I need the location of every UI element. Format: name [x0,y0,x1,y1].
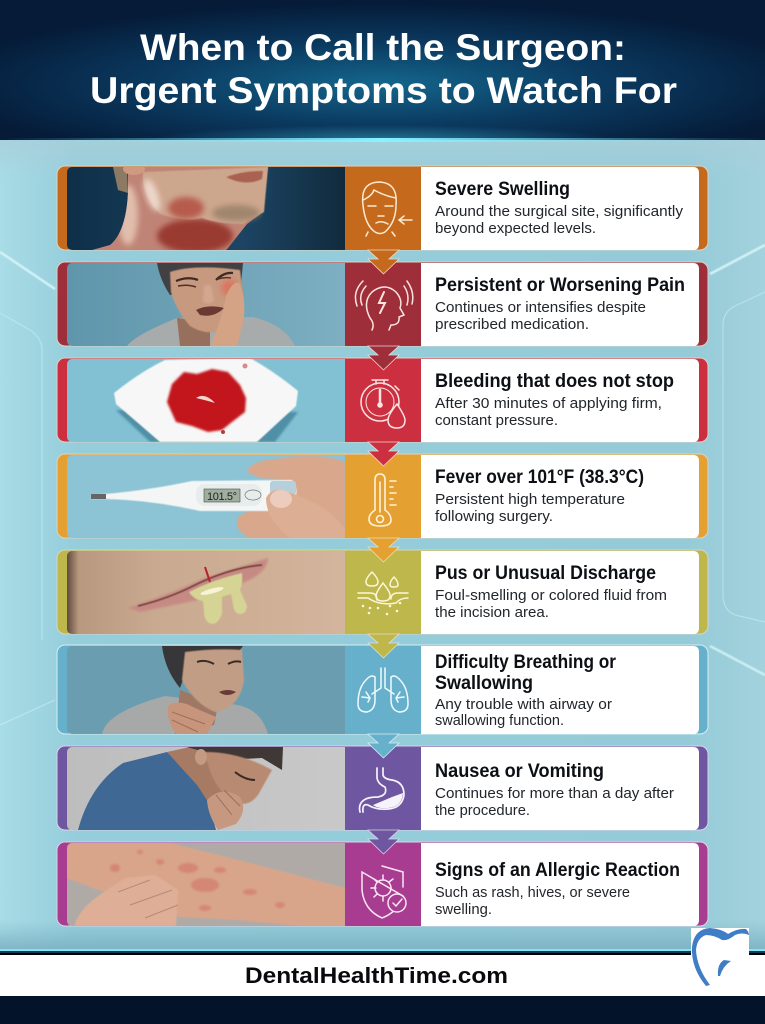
icon: head with pain [355,281,413,330]
photo: man feeling nauseous [67,747,357,830]
white text area [421,747,699,830]
icon: stomach [360,768,404,812]
arrow: nausea to allergic [368,830,399,854]
title [90,27,677,111]
text: nausea: the procedure. [435,803,530,819]
title: When to Call the Surgeon: [140,27,626,68]
header banner [0,0,765,142]
arrow: swelling to pain [368,250,399,274]
text: breathing [435,652,617,729]
icon: face with swelling [363,182,412,236]
icon: lungs [358,668,408,712]
text: persistent pain: Continues or intensifies despite [435,300,646,316]
text: breathing: swallowing function. [435,713,564,729]
website url: DentalHealthTime.com [245,963,508,988]
arrow: pain to bleeding [368,346,399,370]
panel: fever [57,454,708,538]
white text area [421,551,699,634]
colour block [345,843,421,926]
colour block [345,167,421,250]
text: nausea [435,761,674,819]
text: severe swelling: Severe Swelling [435,179,570,200]
panel: nausea [57,746,708,830]
panel: breathing [57,645,708,734]
text: discharge: Foul-smelling or colored fluid from [435,588,667,604]
text: bleeding: constant pressure. [435,413,558,429]
title: Urgent Symptoms to Watch For [90,70,677,111]
text: breathing: Difficulty Breathing or [435,652,617,673]
text: bleeding [435,371,674,429]
text: allergic reaction [435,860,680,918]
colour block [345,359,421,442]
text: severe swelling [435,179,684,237]
text: fever: Persistent high temperature [435,492,625,508]
white text area [421,167,699,250]
white text area [421,263,699,346]
photo: blood on gauze [67,358,357,442]
photo: man with tooth pain [67,263,357,346]
icon: thermometer [369,474,396,526]
text: allergic reaction: Signs of an Allergic Reaction [435,860,680,881]
panel: discharge [57,550,708,634]
text: discharge [435,563,667,621]
icon: stopwatch and drop [361,380,405,428]
text: fever: Fever over 101°F (38.3°C) [435,467,644,488]
white text area [421,646,699,734]
text: allergic reaction: Such as rash, hives, or severe [435,885,630,901]
icon: shield with check [362,866,406,918]
text: severe swelling: Around the surgical site, significantly [435,204,684,220]
panel: bleeding [57,358,708,442]
text: allergic reaction: swelling. [435,902,492,918]
white text area [421,455,699,538]
icon: discharge drops [358,572,408,615]
panel: allergic reaction [57,842,708,926]
text: bleeding: Bleeding that does not stop [435,371,674,392]
colour block [345,263,421,346]
panel: severe swelling [57,163,708,253]
photo: discharge from incision [67,551,357,634]
arrow: discharge to breathing [368,634,399,658]
white text area [421,359,699,442]
photo: swollen jaw [67,167,345,250]
text: discharge: Pus or Unusual Discharge [435,563,656,584]
arrow: bleeding to fever [368,442,399,466]
text: fever: following surgery. [435,509,553,525]
background panel [0,140,765,952]
text: severe swelling: beyond expected levels. [435,221,596,237]
panel: persistent pain [57,262,708,346]
colour block [345,747,421,830]
text: breathing: Swallowing [435,673,533,694]
text: nausea: Nausea or Vomiting [435,761,604,782]
arrow: breathing to nausea [368,734,399,758]
white text area [421,843,699,926]
text: persistent pain: prescribed medication. [435,317,589,333]
text: discharge: the incision area. [435,605,549,621]
colour block [345,551,421,634]
text: nausea: Continues for more than a day after [435,786,674,802]
arrow: fever to discharge [368,538,399,562]
text: persistent pain [435,275,685,333]
photo: rash on arm [67,843,357,926]
text: persistent pain: Persistent or Worsening Pain [435,275,685,296]
photo: man holding throat [67,646,357,734]
photo: thermometer in hand [67,455,357,538]
text: breathing: Any trouble with airway or [435,697,612,713]
text: fever [435,467,644,525]
colour block [345,455,421,538]
photo: thermometer in hand: 101.5° [207,491,237,503]
footer band [0,949,765,1024]
icon: tooth logo [691,928,749,986]
text: bleeding: After 30 minutes of applying firm, [435,396,662,412]
colour block [345,646,421,734]
